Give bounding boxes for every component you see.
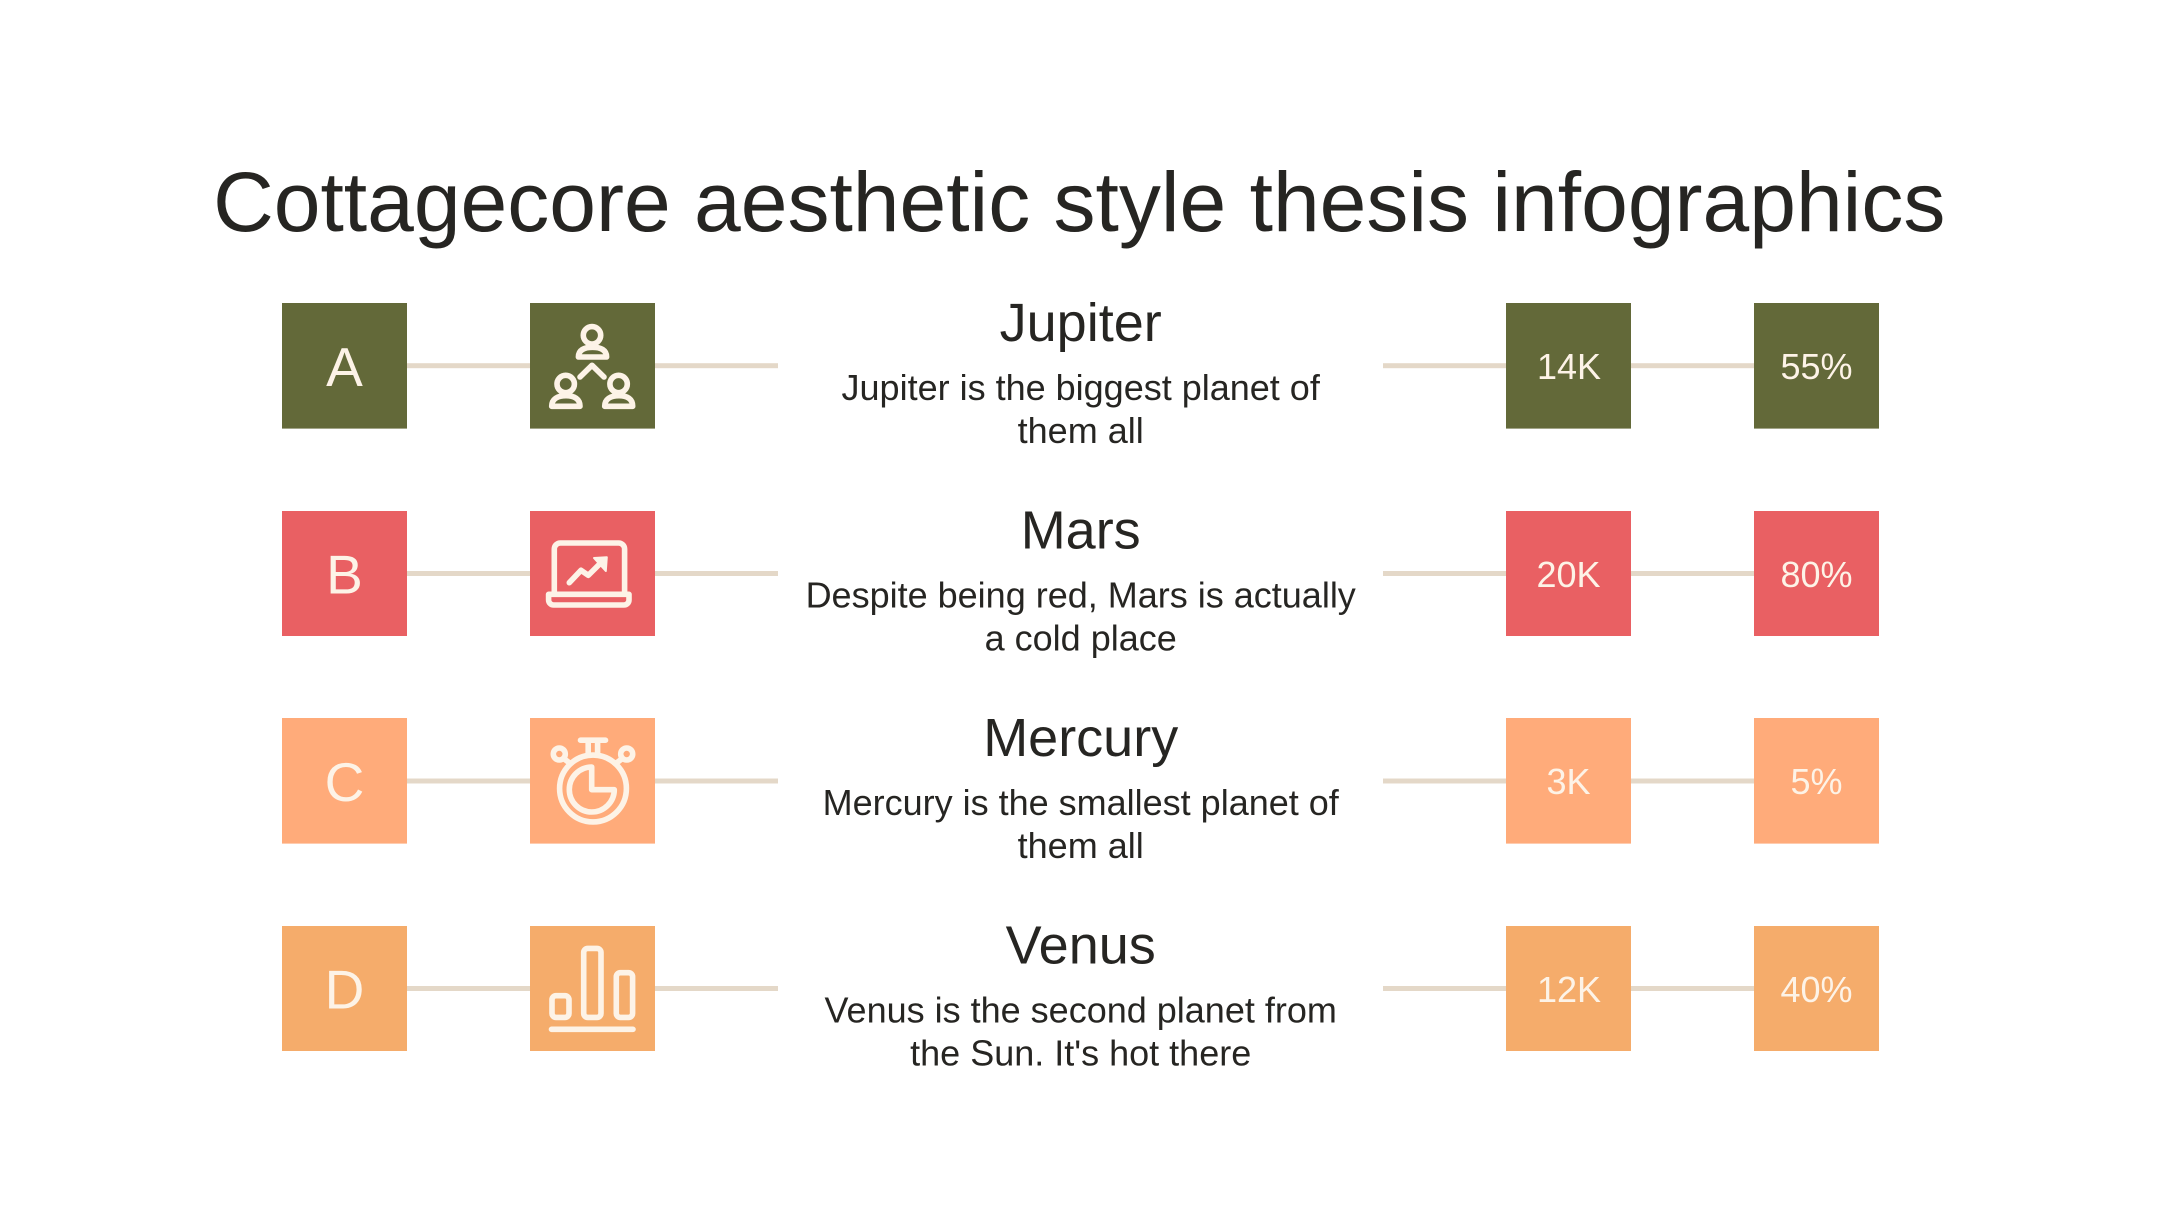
value box 3K: 3K xyxy=(1546,761,1591,802)
letter box D xyxy=(282,926,407,1051)
value box 80%: 80% xyxy=(1780,554,1853,595)
title: Cottagecore aesthetic style thesis infographics xyxy=(213,155,1945,249)
icon box: laptop with rising chart xyxy=(530,511,655,636)
value box 12K: 12K xyxy=(1537,969,1601,1010)
letter box C xyxy=(282,718,407,844)
text: Venus: Venus is the second planet from xyxy=(825,990,1337,1030)
value box 14K xyxy=(1506,303,1631,429)
icon box: bar chart xyxy=(530,926,655,1051)
text: Mercury: Mercury xyxy=(983,708,1178,768)
letter box A: A xyxy=(326,336,363,398)
text: Jupiter: Jupiter xyxy=(1000,293,1162,353)
value box 40%: 40% xyxy=(1780,969,1853,1010)
text: Jupiter xyxy=(842,293,1321,451)
letter box A xyxy=(282,303,407,429)
text: Mars: Mars xyxy=(1021,500,1141,560)
value box 3K xyxy=(1506,718,1631,844)
letter box B xyxy=(282,511,407,636)
value box 20K xyxy=(1506,511,1631,636)
row: Mercury xyxy=(282,708,1879,866)
text: Mars xyxy=(806,500,1356,658)
text: Venus xyxy=(825,916,1337,1074)
letter box C: C xyxy=(325,751,364,813)
value box 5% xyxy=(1754,718,1879,844)
text: Venus: the Sun. It's hot there xyxy=(910,1032,1251,1074)
text: Mercury: them all xyxy=(1018,825,1144,866)
value box 55%: 55% xyxy=(1780,346,1853,387)
icon box: people network xyxy=(530,303,655,429)
text: Mercury xyxy=(823,708,1340,866)
value box 5%: 5% xyxy=(1790,761,1843,802)
value box 20K: 20K xyxy=(1536,554,1601,595)
letter box D: D xyxy=(325,958,364,1020)
icon box: stopwatch xyxy=(530,718,655,844)
row: Mars xyxy=(282,500,1879,658)
value box 12K xyxy=(1506,926,1631,1051)
value box 80% xyxy=(1754,511,1879,636)
value box 14K: 14K xyxy=(1537,346,1601,387)
text: Mars: Despite being red, Mars is actually xyxy=(806,574,1356,616)
text: Mercury: Mercury is the smallest planet of xyxy=(823,782,1340,823)
row: Jupiter xyxy=(282,293,1879,451)
text: Jupiter: Jupiter is the biggest planet of xyxy=(842,367,1321,408)
text: Venus: Venus xyxy=(1006,916,1156,976)
text: Mars: a cold place xyxy=(985,618,1177,658)
value box 40% xyxy=(1754,926,1879,1051)
text: Jupiter: them all xyxy=(1018,410,1144,451)
row: Venus xyxy=(282,916,1879,1074)
letter box B: B xyxy=(326,544,363,606)
value box 55% xyxy=(1754,303,1879,429)
